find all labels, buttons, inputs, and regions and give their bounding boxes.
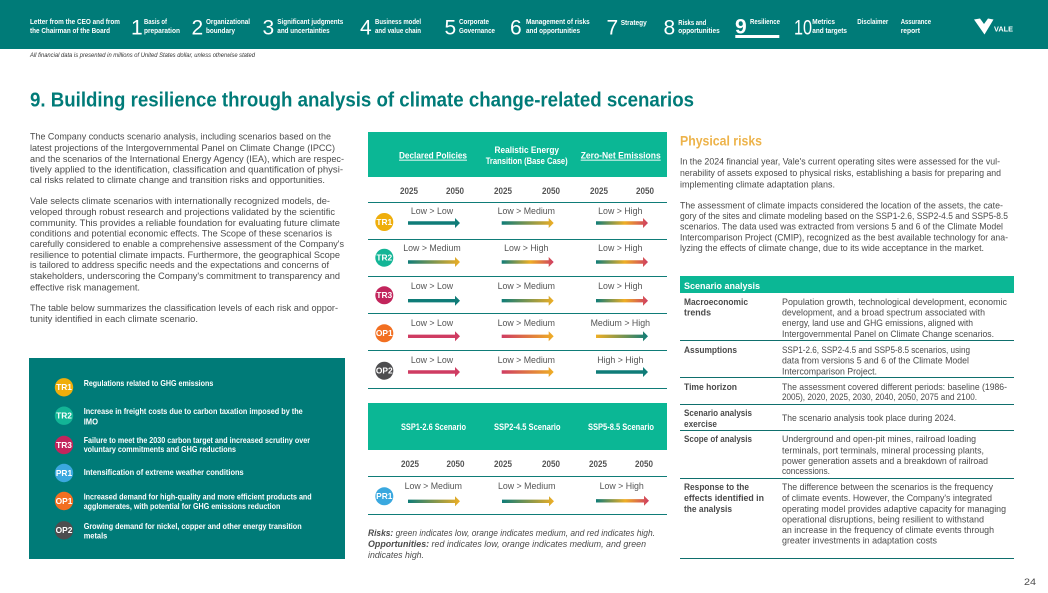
nav: 9 resilience (active): 9 <box>735 16 747 38</box>
row OP2: Low > Medium <box>498 355 555 365</box>
row TR2: Low > Medium <box>403 243 461 253</box>
table header: Scenario analysis <box>684 280 760 291</box>
table header: scenarios: Transition (Base Case) <box>486 156 568 166</box>
row OP2 <box>375 355 648 380</box>
intro text block: and the scenarios of the International Energy Agency (IEA), which are respec- <box>30 154 344 164</box>
row: response to the effects: greater investments in adaptation costs <box>782 536 937 546</box>
physical risks text block: Intercomparison Project (CMIP), recognized as the best available technology for ana- <box>680 232 1008 242</box>
nav: 5 corporate governance: Governance <box>459 26 495 35</box>
row PR1: Low > Medium <box>405 481 462 491</box>
row TR3 <box>375 281 648 306</box>
table header: SSP scenarios: SSP1-2.6 Scenario <box>401 422 466 432</box>
row: response to the effects: effects identified in <box>684 493 764 503</box>
SSP year headers: 2050 <box>635 459 653 469</box>
nav: 6 management of risks: 6 <box>510 16 522 40</box>
color key footnote <box>368 528 655 560</box>
nav: 4 business model: 4 <box>360 16 372 40</box>
table header: SSP scenarios: SSP2-4.5 Scenario <box>494 422 561 432</box>
table header: scenarios <box>368 132 667 177</box>
nav: 1 basis of preparation <box>131 16 180 40</box>
title: 9. Building resilience through analysis of climate change-related scenarios <box>30 90 694 112</box>
legend TR1 <box>55 378 214 396</box>
legend OP2: OP2 <box>56 525 73 535</box>
intro text block: resilience to potential climate impacts. Furthermore, the geographical Scope <box>30 250 340 260</box>
legend OP1 <box>55 492 312 511</box>
row: scenario analysis exercise: The scenario analysis took place during 2024. <box>782 413 956 423</box>
legend TR2: Increase in freight costs due to carbon taxation imposed by the <box>84 406 303 416</box>
intro text block: cal risks related to climate change and transition risks and opportunities. <box>30 175 325 185</box>
physical risks text block: The assessment of climate impacts considered the location of the assets, the cate- <box>680 200 1003 210</box>
color key footnote: indicates high. <box>368 550 424 560</box>
row: response to the effects <box>684 482 1006 546</box>
nav: 10 metrics and targets: and targets <box>812 26 847 35</box>
nav: 3 significant judgments <box>262 16 343 40</box>
nav: 3 significant judgments: and uncertainties <box>277 26 330 35</box>
row OP2: Low > Low <box>411 355 454 365</box>
intro text block: is tailored to address specific needs and the expectations and concerns of <box>30 260 329 270</box>
nav: letter from the CEO: Letter from the CEO and from <box>30 17 120 26</box>
nav: 3 significant judgments: 3 <box>262 16 274 40</box>
legend OP2: metals <box>84 531 108 541</box>
nav: 8 risks and opportunities: opportunities <box>678 26 720 35</box>
row: response to the effects: Response to the <box>684 482 749 492</box>
nav: 10 metrics and targets <box>794 16 847 40</box>
physical risks text block: lyzing the effects of climate change, due to its wide acceptance in the market. <box>680 243 984 253</box>
row: macroeconomic trends: energy, land use and GHG emissions, aligned with <box>782 318 973 328</box>
legend TR1: Regulations related to GHG emissions <box>84 378 214 388</box>
row: response to the effects: of climate events. However, the Company's integrated <box>782 493 992 503</box>
row: scope of analysis: concessions. <box>782 466 830 476</box>
row: scenario analysis exercise: exercise <box>684 419 717 429</box>
legend PR1: PR1 <box>56 468 72 478</box>
row: macroeconomic trends: Macroeconomic <box>684 297 748 307</box>
legend TR3 <box>55 435 311 454</box>
nav: 2 organizational boundary <box>192 16 250 40</box>
row TR2 <box>375 243 648 267</box>
row OP2: High > High <box>597 355 644 365</box>
nav: 10 metrics and targets: Metrics <box>812 17 835 26</box>
panel: scenario analysis table <box>680 276 1014 558</box>
nav: assurance report <box>901 17 931 35</box>
table header: scenarios: Realistic Energy <box>494 145 560 155</box>
physical risks heading: Physical risks <box>680 132 762 148</box>
row: time horizon <box>684 382 1007 402</box>
intro text block: effective risk management. <box>30 282 140 292</box>
currency note: All financial data is presented in millions of United States dollar, unless otherwise stated <box>29 52 256 59</box>
legend TR2 <box>55 406 303 427</box>
year headers: 2050 <box>542 186 560 196</box>
table header: SSP scenarios <box>368 403 667 450</box>
row: macroeconomic trends: Population growth, technological development, economic <box>782 297 1007 307</box>
legend TR3: voluntary commitments and GHG reductions <box>84 444 236 454</box>
nav: 1 basis of preparation: 1 <box>131 16 143 40</box>
physical risks text block <box>680 157 1008 253</box>
legend OP2 <box>55 521 302 541</box>
nav: 10 metrics and targets: 10 <box>794 16 812 40</box>
SSP year headers: 2050 <box>542 459 560 469</box>
legend TR3: TR3 <box>56 440 72 450</box>
nav: 6 management of risks: and opportunities <box>526 26 580 35</box>
nav: assurance report: Assurance <box>901 17 931 26</box>
row: macroeconomic trends: Intergovernmental Panel on Climate Change scenarios. <box>782 329 994 339</box>
row TR2: Low > High <box>504 243 549 253</box>
SSP year headers: 2050 <box>446 459 465 469</box>
panel: transition scenarios table <box>368 132 667 388</box>
intro text block: community. This provides a reliable foundation for evaluating future climate <box>30 218 340 228</box>
color key footnote: Risks: green indicates low, orange indicates medium, and red indicates high. <box>368 528 655 538</box>
row TR3: Low > Low <box>411 281 454 291</box>
physical risks text block: scenarios. The data used was extracted from versions 5 and 6 of the Climate Model <box>680 221 1003 231</box>
row: assumptions: data from versions 5 and 6 of the Climate Model <box>782 355 969 365</box>
intro text block: conditions and potential economic effects. The Scope of these scenarios is <box>30 228 332 238</box>
nav: 4 business model: and value chain <box>375 26 421 35</box>
row: macroeconomic trends: trends <box>684 307 711 317</box>
legend TR2: IMO <box>84 417 98 427</box>
nav: 8 risks and opportunities: 8 <box>664 16 675 40</box>
nav: 3 significant judgments: Significant judgments <box>277 17 343 26</box>
legend PR1 <box>55 464 244 482</box>
SSP year headers: 2025 <box>589 459 607 469</box>
row: response to the effects: operational disruptions, being resilient to withstand <box>782 514 984 524</box>
intro text block: stakeholders, underscoring the Company's commitment to transparency and <box>30 271 340 281</box>
nav: letter from the CEO: the Chairman of the Board <box>30 26 110 35</box>
row OP1 <box>375 318 650 342</box>
row: scope of analysis: power generation assets and a breakdown of railroad <box>782 456 988 466</box>
intro text block: latest projections of the Intergovernmental Panel on Climate Change (IPCC) <box>30 143 335 153</box>
row: time horizon: The assessment covered different periods: baseline (1986- <box>782 382 1007 392</box>
intro text block: The Company conducts scenario analysis, including scenarios based on the <box>30 132 331 142</box>
row TR2: Low > High <box>598 243 643 253</box>
year headers <box>400 186 654 196</box>
SSP year headers: 2025 <box>494 459 512 469</box>
intro text block: tunity identified in each climate scenario. <box>30 314 198 324</box>
icon: Vale logo: VALE <box>994 24 1013 34</box>
row: scope of analysis: terminals, port terminals, mineral processing plants, <box>782 445 984 455</box>
SSP year headers <box>401 459 653 469</box>
nav: 4 business model <box>360 16 421 40</box>
nav: letter from the CEO <box>30 17 120 35</box>
intro text block: tively applied to the identification, classification and quantification of physi- <box>30 164 343 174</box>
navigation bar <box>0 0 1048 49</box>
table header <box>680 276 1014 293</box>
nav: 9 resilience (active): Resilience <box>750 17 780 26</box>
icon: Vale logo <box>974 18 1013 34</box>
row: assumptions: SSP1-2.6, SSP2-4.5 and SSP5-8.5 scenarios, using <box>782 345 970 355</box>
row: response to the effects: the analysis <box>684 504 732 514</box>
table header: scenarios: Declared Policies <box>399 151 467 161</box>
row: response to the effects: an increase in the frequency of climate events through <box>782 525 994 535</box>
row TR3: Low > Medium <box>498 281 555 291</box>
table header: SSP scenarios: SSP5-8.5 Scenario <box>588 422 654 432</box>
row TR1: Low > Medium <box>498 206 555 216</box>
physical risks text block: nerability of assets exposed to physical risks, establishing a basis for preparing and <box>680 168 1001 178</box>
intro text block: Vale selects climate scenarios with internationally recognized models, de- <box>30 196 330 206</box>
nav: 2 organizational boundary: 2 <box>192 16 203 40</box>
nav: 5 corporate governance <box>444 16 495 40</box>
table header: scenarios: Zero-Net Emissions <box>581 151 661 161</box>
legend TR2: TR2 <box>56 411 72 421</box>
physical risks text block: gory of the sites and climate modeling based on the SSP1-2.6, SSP2-4.5 and SSP5-8.5 <box>680 211 1008 221</box>
row: macroeconomic trends: development, and a broad spectrum associated with <box>782 307 985 317</box>
nav: 6 management of risks: Management of risks <box>526 17 590 26</box>
row: scope of analysis: Scope of analysis <box>684 434 752 444</box>
year headers: 2025 <box>400 186 418 196</box>
nav: 5 corporate governance: Corporate <box>459 17 489 26</box>
row TR3: TR3 <box>376 290 393 300</box>
legend OP2: Growing demand for nickel, copper and other energy transition <box>84 521 302 531</box>
row TR2: TR2 <box>376 252 393 262</box>
row: time horizon: Time horizon <box>684 382 737 392</box>
legend TR3: Failure to meet the 2030 carbon target and increased scrutiny over <box>84 435 311 445</box>
year headers: 2050 <box>446 186 464 196</box>
nav: 7 strategy: 7 <box>606 16 618 40</box>
physical risks text block: implementing climate adaptation plans. <box>680 179 835 189</box>
nav: 7 strategy <box>606 16 647 40</box>
nav: 1 basis of preparation: Basis of <box>144 17 167 26</box>
row: response to the effects: operating model provides adaptive capacity for managing <box>782 504 1006 514</box>
row: assumptions <box>684 345 970 376</box>
row: scenario analysis exercise: Scenario analysis <box>684 408 752 418</box>
row OP2: OP2 <box>376 366 393 376</box>
nav: 8 risks and opportunities: Risks and <box>678 18 707 27</box>
legend OP1: OP1 <box>56 496 73 506</box>
nav: 1 basis of preparation: preparation <box>144 26 180 35</box>
nav: assurance report: report <box>901 26 920 35</box>
row: scope of analysis: Underground and open-pit mines, railroad loading <box>782 434 976 444</box>
SSP year headers: 2025 <box>401 459 419 469</box>
legend OP1: Increased demand for high-quality and more efficient products and <box>84 492 312 502</box>
row: macroeconomic trends <box>684 297 1007 339</box>
row: assumptions: Intercomparison Project. <box>782 366 877 376</box>
nav: 5 corporate governance: 5 <box>444 16 456 40</box>
row: scope of analysis <box>684 434 988 476</box>
nav: 9 resilience (active) <box>735 16 780 38</box>
nav: 8 risks and opportunities <box>664 16 720 40</box>
page number: 24 <box>1024 577 1036 588</box>
nav: 7 strategy: Strategy <box>621 18 647 27</box>
nav: 4 business model: Business model <box>375 17 421 26</box>
intro text block: The table below summarizes the classification levels of each risk and oppor- <box>30 303 338 313</box>
row: response to the effects: The difference between the scenarios is the frequency <box>782 482 993 492</box>
row TR3: Low > High <box>598 281 643 291</box>
legend TR1: TR1 <box>56 382 72 392</box>
legend PR1: Intensification of extreme weather conditions <box>84 467 244 477</box>
panel: SSP scenarios table <box>368 403 667 514</box>
row TR1 <box>375 206 648 231</box>
row: assumptions: Assumptions <box>684 345 737 355</box>
row OP1: OP1 <box>376 328 393 338</box>
row OP1: Low > Medium <box>498 318 555 328</box>
year headers: 2050 <box>636 186 654 196</box>
nav: disclaimer: Disclaimer <box>857 17 888 26</box>
intro text block <box>30 132 344 324</box>
row: scenario analysis exercise <box>684 408 956 429</box>
intro text block: carefully considered to enable a comprehensive assessment of the Company's <box>30 239 344 249</box>
row: time horizon: 2005), 2020, 2025, 2030, 2040, 2050, 2075 and 2100. <box>782 392 977 402</box>
row TR1: Low > Low <box>411 206 454 216</box>
row OP1: Medium > High <box>591 318 650 328</box>
row PR1: PR1 <box>376 491 393 501</box>
row PR1 <box>375 481 649 506</box>
nav: 6 management of risks <box>510 16 590 40</box>
color key footnote: Opportunities: red indicates low, orange indicates medium, and green <box>368 539 646 549</box>
nav: 2 organizational boundary: boundary <box>206 26 236 35</box>
row TR1: TR1 <box>376 217 393 227</box>
year headers: 2025 <box>494 186 512 196</box>
row TR1: Low > High <box>598 206 643 216</box>
legend OP1: agglomerates, with potential for GHG emissions reduction <box>84 501 280 511</box>
year headers: 2025 <box>590 186 608 196</box>
nav: 2 organizational boundary: Organizational <box>206 17 250 26</box>
panel: risk and opportunity legend <box>29 358 345 559</box>
physical risks text block: In the 2024 financial year, Vale's current operating sites were assessed for the vul- <box>680 157 1000 167</box>
row PR1: Low > High <box>600 481 644 491</box>
row OP1: Low > Low <box>411 318 454 328</box>
row PR1: Low > Medium <box>498 481 555 491</box>
intro text block: veloped through robust research and projections validated by the scientific <box>30 207 335 217</box>
